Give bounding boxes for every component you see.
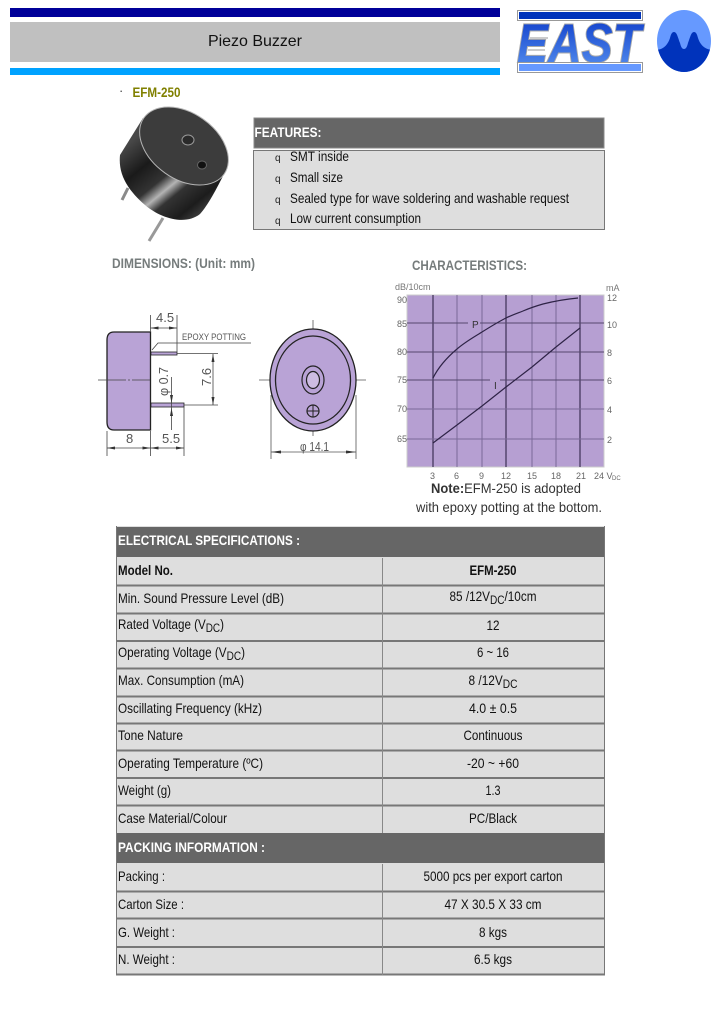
parameter names: Tone Nature xyxy=(118,727,183,743)
parameter values: 6.5 kgs xyxy=(474,951,512,967)
axis labels: 6 xyxy=(454,471,459,481)
feature list: q xyxy=(275,174,281,185)
parameter values: 85 /12V xyxy=(450,588,498,604)
packing information header xyxy=(117,833,604,863)
parameter names: G. Weight : xyxy=(118,924,175,940)
curve labels xyxy=(468,320,500,392)
parameter names: Operating Temperature (ºC) xyxy=(118,755,263,771)
parameter values: 1.3 xyxy=(486,782,501,798)
note: Note:EFM-250 is adopted xyxy=(431,480,581,496)
feature list: Low current consumption xyxy=(290,210,421,226)
parameter names: Packing : xyxy=(118,868,165,884)
dimension labels: φ 0.7 xyxy=(156,367,171,396)
parameter values: 4.0 ± 0.5 xyxy=(469,700,517,716)
dimension drawing: side view xyxy=(98,310,251,456)
feature list: q xyxy=(275,216,281,227)
parameter names: Max. Consumption (mA) xyxy=(118,672,244,688)
parameter values: 6 ~ 16 xyxy=(477,644,509,660)
feature list: q xyxy=(275,195,281,206)
dimension labels xyxy=(126,310,246,446)
parameter names: DC xyxy=(227,649,241,663)
axis labels: 85 xyxy=(397,319,407,329)
axis labels xyxy=(395,282,621,482)
parameter names: Weight (g) xyxy=(118,782,171,798)
note xyxy=(415,480,602,515)
characteristics heading: CHARACTERISTICS: xyxy=(412,257,527,273)
header bars with title xyxy=(10,8,500,75)
curve I xyxy=(433,328,580,443)
dimensions heading: DIMENSIONS: (Unit: mm) xyxy=(112,255,255,271)
feature list: Sealed type for wave soldering and washable request xyxy=(290,190,569,206)
curve P xyxy=(433,298,578,378)
axis labels: 6 xyxy=(607,376,612,386)
parameter names: Operating Voltage (V xyxy=(118,644,248,660)
axis labels: 21 xyxy=(576,471,586,481)
curve labels: P xyxy=(472,320,479,331)
diameter label: φ 14.1 xyxy=(300,439,329,454)
parameter values: -20 ~ +60 xyxy=(467,755,519,771)
parameter values: 5000 pcs per export carton xyxy=(424,868,562,884)
feature list: SMT inside xyxy=(290,148,349,164)
chart: sound pressure and current vs voltage xyxy=(395,282,621,482)
dimension labels: 4.5 xyxy=(156,310,174,325)
axis labels: 10 xyxy=(607,320,617,330)
axis labels: 90 xyxy=(397,295,407,305)
axis labels: 8 xyxy=(607,348,612,358)
feature list: Small size xyxy=(290,169,343,185)
axis labels: 24 V xyxy=(594,471,613,481)
axis labels: 80 xyxy=(397,347,407,357)
electrical specifications header xyxy=(117,527,604,557)
feature list xyxy=(275,148,569,227)
axis labels: 70 xyxy=(397,404,407,414)
table: specifications xyxy=(116,526,605,975)
panel: features xyxy=(254,118,604,230)
parameter values: 12 xyxy=(486,617,500,633)
parameter values: DC xyxy=(503,677,518,691)
axis labels: 2 xyxy=(607,435,612,445)
axis labels: 12 xyxy=(607,293,617,303)
model name: · xyxy=(119,83,123,98)
parameter values: /10cm xyxy=(505,588,536,604)
dimension labels: EPOXY POTTING xyxy=(182,332,246,342)
logo: wave oval xyxy=(657,10,711,72)
model name: EFM-250 xyxy=(132,84,181,100)
parameter names: DC xyxy=(206,621,220,635)
parameter names: ) xyxy=(220,616,224,632)
axis labels: 9 xyxy=(479,471,484,481)
parameter names: Carton Size : xyxy=(118,896,184,912)
table: specifications: PACKING INFORMATION : xyxy=(118,839,265,855)
parameter values: PC/Black xyxy=(469,810,518,826)
curve labels: I xyxy=(494,381,497,392)
parameter names: Case Material/Colour xyxy=(118,810,227,826)
parameter names: Model No. xyxy=(118,562,173,578)
axis labels: DC xyxy=(612,476,621,482)
axis labels: 4 xyxy=(607,405,612,415)
dimension labels: 8 xyxy=(126,431,133,446)
axis labels: mA xyxy=(606,283,620,293)
dimension labels: 5.5 xyxy=(162,431,180,446)
parameter names: N. Weight : xyxy=(118,951,175,967)
logo: EAST wordmark: EAST xyxy=(517,12,645,74)
axis labels: 3 xyxy=(430,471,435,481)
arrowheads xyxy=(107,326,214,450)
parameter values: 8 kgs xyxy=(479,924,507,940)
parameter names: Min. Sound Pressure Level (dB) xyxy=(118,590,284,606)
feature list: q xyxy=(275,153,281,164)
parameter values: DC xyxy=(490,593,505,607)
parameter names: ) xyxy=(241,644,245,660)
parameter names xyxy=(118,562,284,967)
parameter names: Oscillating Frequency (kHz) xyxy=(118,700,262,716)
parameter values: EFM-250 xyxy=(470,562,517,578)
parameter values: 8 /12V xyxy=(468,672,509,688)
table: specifications: ELECTRICAL SPECIFICATIONS : xyxy=(118,532,300,548)
parameter values: Continuous xyxy=(464,727,522,743)
dimension labels: 7.6 xyxy=(199,368,214,386)
dimension drawing: bottom view xyxy=(259,320,366,459)
features heading: FEATURES: xyxy=(254,124,322,140)
axis labels: 12 xyxy=(501,471,511,481)
axis labels: 75 xyxy=(397,375,407,385)
parameter values: 47 X 30.5 X 33 cm xyxy=(444,896,542,912)
axis labels: 18 xyxy=(551,471,561,481)
product photo: buzzer xyxy=(120,91,243,241)
axis labels: 65 xyxy=(397,434,407,444)
note: with epoxy potting at the bottom. xyxy=(415,499,602,515)
parameter names: Rated Voltage (V xyxy=(118,616,224,632)
model name xyxy=(119,83,181,100)
parameter values xyxy=(424,562,562,967)
axis labels: dB/10cm xyxy=(395,282,431,292)
axis labels: 15 xyxy=(527,471,537,481)
title: Piezo Buzzer xyxy=(208,33,303,50)
